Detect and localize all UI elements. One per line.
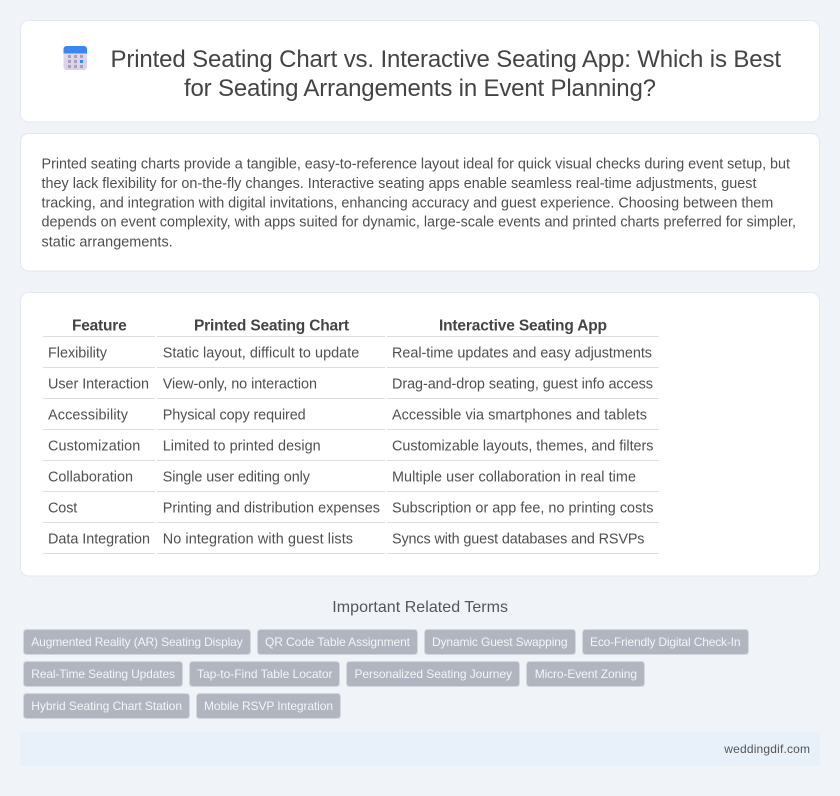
- row: accessibility: Accessible via smartphones and tablets: [392, 408, 647, 424]
- description text: static arrangements.: [42, 234, 173, 250]
- row: user interaction: View-only, no interaction: [163, 376, 317, 392]
- tag: Augmented Reality (AR) Seating Display: [31, 635, 243, 649]
- row: customization: [43, 438, 659, 460]
- tag: [24, 662, 182, 686]
- tag: [424, 630, 576, 654]
- tag: Eco-Friendly Digital Check-In: [590, 635, 740, 649]
- row: collaboration: [43, 470, 659, 492]
- row: collaboration: Collaboration: [48, 470, 133, 486]
- panel: description: [20, 134, 820, 271]
- tag: Hybrid Seating Chart Station: [31, 699, 182, 713]
- footer: [20, 732, 820, 766]
- table header: [43, 318, 659, 336]
- tag: [24, 694, 190, 718]
- row: accessibility: [43, 408, 659, 430]
- row: cost: Subscription or app fee, no printing costs: [392, 500, 654, 516]
- tag: [526, 662, 644, 686]
- row: data integration: Syncs with guest databases and RSVPs: [392, 532, 644, 548]
- tag: [346, 662, 520, 686]
- row: flexibility: [43, 346, 659, 368]
- row: customization: Limited to printed design: [163, 438, 321, 454]
- heading: related terms: Important Related Terms: [332, 599, 508, 616]
- row: customization: Customizable layouts, themes, and filters: [392, 438, 654, 454]
- panel: comparison table: [20, 292, 820, 576]
- tag: Mobile RSVP Integration: [204, 699, 333, 713]
- table header: Printed Seating Chart: [194, 318, 349, 335]
- row: flexibility: Static layout, difficult to update: [163, 346, 359, 362]
- row: data integration: Data Integration: [48, 532, 150, 548]
- row: cost: Printing and distribution expenses: [163, 500, 380, 516]
- tag: [190, 662, 340, 686]
- panel: title card: [20, 20, 820, 122]
- row: user interaction: User Interaction: [48, 376, 149, 392]
- row: cost: [43, 500, 659, 522]
- tag: [24, 630, 250, 654]
- row: accessibility: Physical copy required: [163, 408, 306, 424]
- row: collaboration: Single user editing only: [163, 470, 311, 486]
- description text: [42, 156, 796, 250]
- tag: Real-Time Seating Updates: [31, 667, 175, 681]
- tag: Dynamic Guest Swapping: [432, 635, 568, 649]
- row: data integration: No integration with guest lists: [163, 532, 353, 548]
- row: flexibility: Real-time updates and easy adjustments: [392, 346, 652, 362]
- title: Printed Seating Chart vs. Interactive Seating App: Which is Best: [110, 46, 781, 73]
- tag: [258, 630, 418, 654]
- tag: [582, 630, 748, 654]
- tag group: related terms: [24, 630, 748, 718]
- row: accessibility: Accessibility: [48, 408, 129, 424]
- row: user interaction: [43, 376, 659, 398]
- row: user interaction: Drag-and-drop seating, guest info access: [392, 376, 653, 392]
- icon: seating calendar: [64, 46, 87, 70]
- tag: QR Code Table Assignment: [265, 635, 411, 649]
- title: [110, 46, 781, 102]
- title: for Seating Arrangements in Event Planning?: [184, 75, 656, 102]
- description text: tracking, and integration with digital invitations, enhancing accuracy and guest experience. Choosing between them: [42, 195, 773, 211]
- description text: Printed seating charts provide a tangible, easy-to-reference layout ideal for quick visual checks during event setup, but: [42, 156, 790, 172]
- description text: depends on event complexity, with apps suited for dynamic, large-scale events and printed charts preferred for simpler,: [42, 215, 796, 231]
- row: cost: Cost: [48, 500, 77, 516]
- tag: Personalized Seating Journey: [354, 667, 512, 681]
- table header: Feature: [72, 318, 127, 335]
- table header: Interactive Seating App: [439, 318, 607, 335]
- row: collaboration: Multiple user collaboration in real time: [392, 470, 636, 486]
- tag: [196, 694, 340, 718]
- description text: they lack flexibility for on-the-fly changes. Interactive seating apps enable seamless real-time adjustments, guest: [42, 176, 756, 192]
- tag: Micro-Event Zoning: [535, 667, 637, 681]
- tag: Tap-to-Find Table Locator: [197, 667, 332, 681]
- row: data integration: [43, 532, 659, 554]
- row: flexibility: Flexibility: [48, 346, 108, 362]
- footer: weddingdif.com: [723, 742, 810, 756]
- row: customization: Customization: [48, 438, 140, 454]
